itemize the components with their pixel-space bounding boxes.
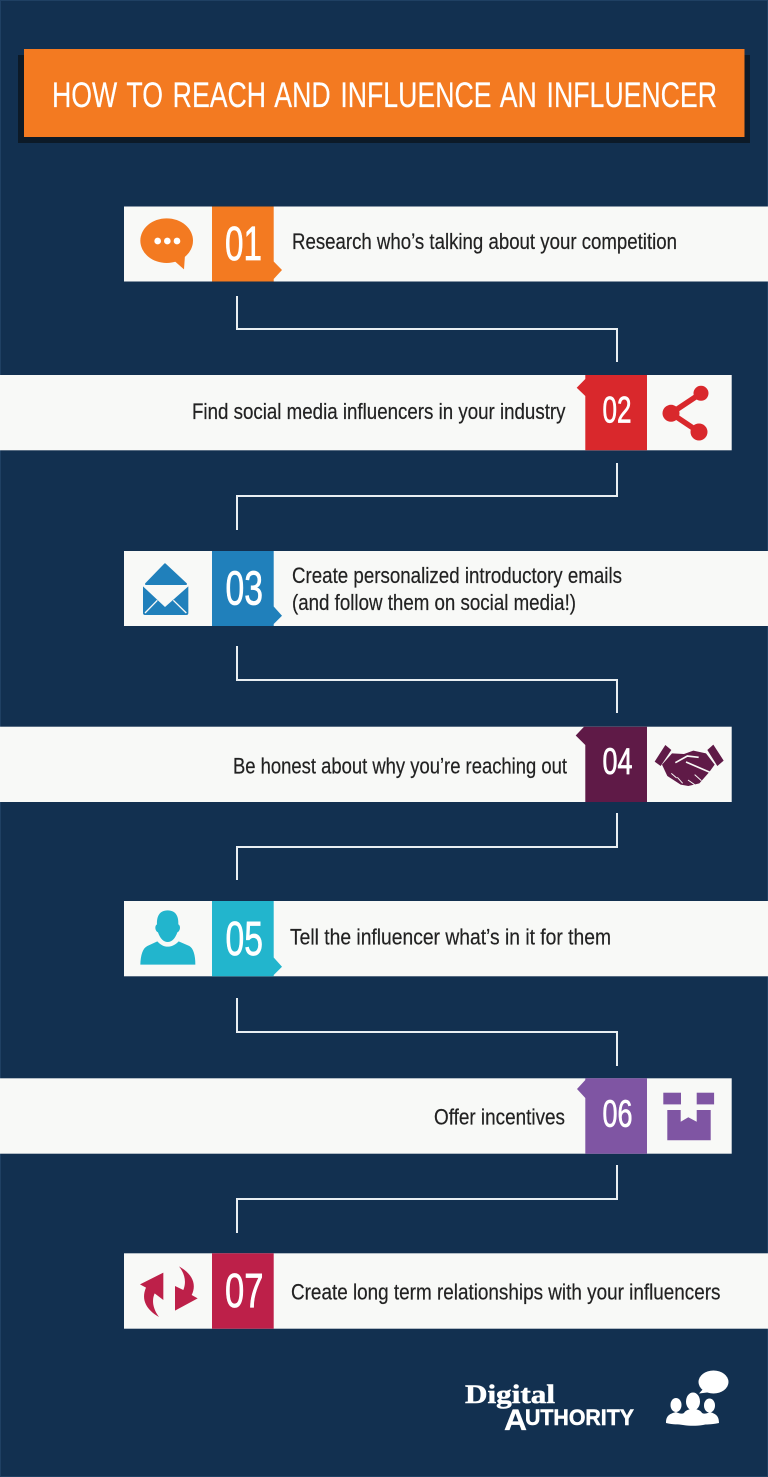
step 3 panel xyxy=(124,551,768,626)
number badge 04: 04 xyxy=(602,741,632,782)
step 1 text: Research who’s talking about your competition xyxy=(292,229,677,254)
step 2 panel xyxy=(0,375,732,450)
logo: Digital Authority: UTHORITY xyxy=(525,1405,634,1430)
number badge 05: 05 xyxy=(226,913,263,966)
number badge 06: 06 xyxy=(602,1094,632,1136)
logo: Digital Authority xyxy=(465,1380,634,1437)
number badge 03 xyxy=(212,551,282,626)
connector 2 to 3 xyxy=(237,463,617,530)
logo: Digital Authority: A xyxy=(504,1404,527,1437)
icon: exchange arrows xyxy=(140,1266,198,1317)
step 7 panel xyxy=(124,1253,768,1329)
connector 1 to 2 xyxy=(237,296,617,362)
number badge 07 xyxy=(212,1253,274,1329)
icon: people with speech bubble xyxy=(666,1370,728,1426)
number badge 05 xyxy=(212,901,282,976)
number badge 04 xyxy=(576,727,647,802)
connector 5 to 6 xyxy=(237,998,617,1066)
connector 6 to 7 xyxy=(237,1165,617,1233)
logo: Digital Authority: Digital xyxy=(465,1380,555,1409)
icon: gift box xyxy=(663,1093,714,1140)
step 6 panel xyxy=(0,1078,732,1154)
number badge 02: 02 xyxy=(602,390,632,430)
number badge 02 xyxy=(577,375,647,450)
icon: envelope xyxy=(143,564,188,615)
step 5 panel xyxy=(124,901,768,976)
icon: handshake xyxy=(655,745,724,786)
step 4 panel xyxy=(0,727,732,802)
connector 3 to 4 xyxy=(237,646,617,713)
icon: speech bubble xyxy=(140,218,193,269)
icon: share xyxy=(662,386,708,440)
step 4 text: Be honest about why you’re reaching out xyxy=(233,754,567,778)
title banner xyxy=(18,49,750,143)
step 2 text: Find social media influencers in your industry xyxy=(192,399,566,424)
step 1 panel xyxy=(124,206,768,282)
step 3 panel: (and follow them on social media!) xyxy=(292,590,576,615)
number badge 06 xyxy=(577,1078,647,1154)
number badge 01 xyxy=(212,206,282,282)
number badge 01: 01 xyxy=(225,218,262,271)
number badge 03: 03 xyxy=(226,562,263,616)
step 3 text: Create personalized introductory emails xyxy=(292,563,622,588)
step 6 text: Offer incentives xyxy=(434,1104,565,1130)
number badge 07: 07 xyxy=(225,1265,264,1318)
connector 4 to 5 xyxy=(237,813,617,880)
step 5 text: Tell the influencer what’s in it for them xyxy=(290,924,611,950)
icon: person xyxy=(140,910,195,965)
